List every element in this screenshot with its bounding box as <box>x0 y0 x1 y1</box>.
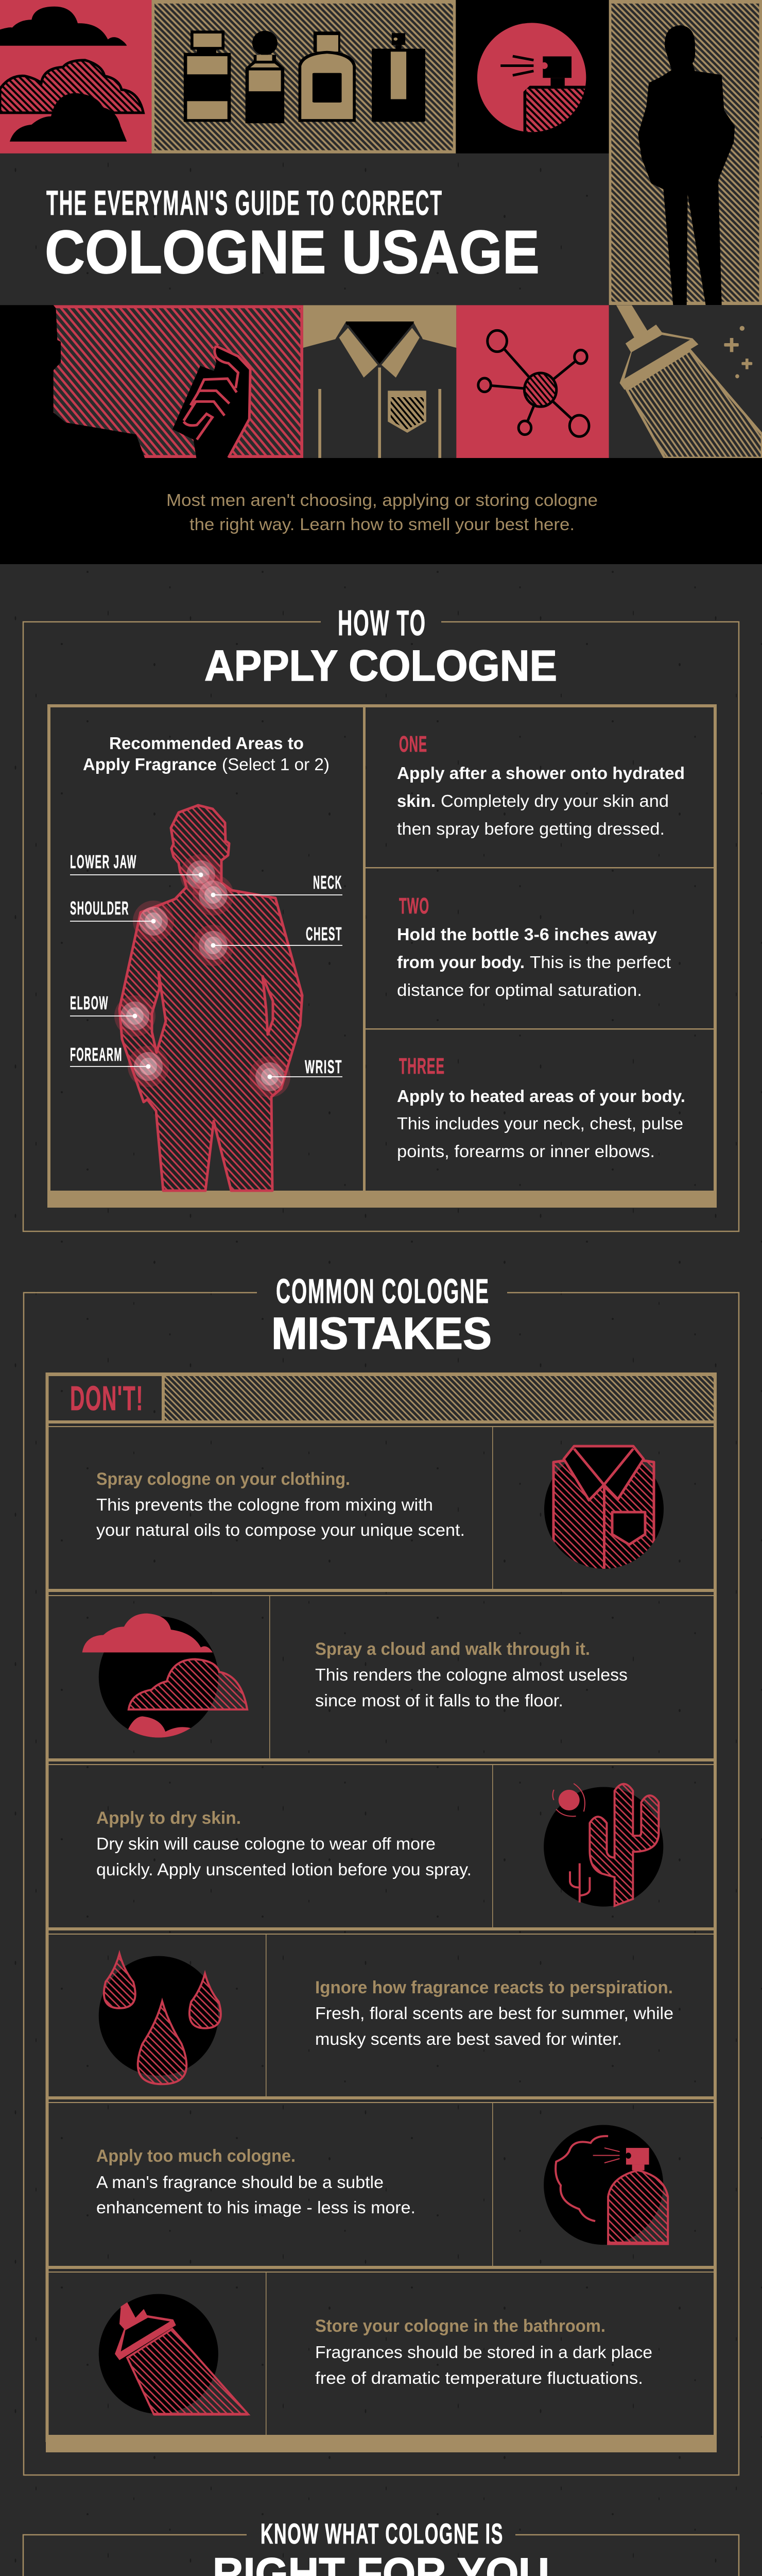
step two <box>397 893 671 999</box>
step three: points, forearms or inner elbows. <box>397 1142 655 1161</box>
recommended areas heading: Recommended Areas to <box>109 734 304 753</box>
label: neck: NECK <box>313 872 342 893</box>
mistake 2 text: This renders the cologne almost useless <box>315 1665 628 1684</box>
mistake 2 text: Spray a cloud and walk through it. <box>315 1639 590 1659</box>
heading: apply cologne: APPLY COLOGNE <box>204 641 557 690</box>
mistake 3 text: Dry skin will cause cologne to wear off more <box>96 1834 436 1853</box>
panel: clouds <box>0 0 151 154</box>
intro text: Most men aren't choosing, applying or storing cologne <box>166 490 598 510</box>
panel: man with hand <box>0 305 303 458</box>
body diagram <box>70 805 342 1191</box>
step three: Apply to heated areas of your body. <box>397 1087 685 1106</box>
section frame <box>24 1293 739 2475</box>
mistake 6 text <box>315 2316 652 2387</box>
step three: This includes your neck, chest, pulse <box>397 1114 683 1133</box>
heading line: kicker: THE EVERYMAN'S GUIDE TO CORRECT <box>46 183 443 223</box>
step two: from your body. <box>397 953 525 972</box>
icon: sweat drops <box>99 1954 221 2084</box>
mistake 6 text: Store your cologne in the bathroom. <box>315 2316 605 2336</box>
icon: spray bottle <box>544 2125 669 2245</box>
step two: TWO <box>399 893 429 919</box>
mistake 5 text: Apply too much cologne. <box>96 2146 296 2166</box>
recommended areas heading: Apply Fragrance <box>83 755 217 774</box>
section: know what cologne is right for you <box>23 2517 739 2576</box>
mistake 3 text: Apply to dry skin. <box>96 1808 241 1828</box>
mistake 1 text <box>96 1469 465 1539</box>
mistake 4 text: musky scents are best saved for winter. <box>315 2029 622 2048</box>
icon: shower <box>99 2294 248 2416</box>
section frame <box>23 622 739 1231</box>
step two: distance for optimal saturation. <box>397 980 642 999</box>
mistake 5 text <box>96 2146 415 2217</box>
panel: molecule <box>456 305 609 458</box>
label: shoulder: SHOULDER <box>70 897 129 919</box>
intro band <box>0 458 762 564</box>
panel: cologne bottles <box>151 0 456 154</box>
mistake 1 text: This prevents the cologne from mixing with <box>96 1495 433 1514</box>
step one <box>397 732 685 838</box>
step three: THREE <box>399 1054 445 1079</box>
step one: then spray before getting dressed. <box>397 819 665 838</box>
step two: This is the perfect <box>530 953 671 972</box>
mistake 2 text <box>315 1639 628 1710</box>
header illustration row 1 <box>0 0 762 305</box>
mistake 2 text: since most of it falls to the floor. <box>315 1691 563 1710</box>
step one: Apply after a shower onto hydrated <box>397 764 685 783</box>
heading: common cologne: COMMON COLOGNE <box>276 1272 490 1311</box>
row dividers <box>46 1426 717 2435</box>
step one: ONE <box>399 732 427 757</box>
label: chest: CHEST <box>306 923 342 944</box>
heading: know what cologne is: KNOW WHAT COLOGNE IS <box>261 2517 504 2550</box>
don't banner <box>46 1372 717 1423</box>
step two: Hold the bottle 3-6 inches away <box>397 925 657 944</box>
application points <box>114 854 290 1097</box>
step three <box>397 1054 685 1161</box>
heading: guide title <box>45 183 540 286</box>
panel: mistakes list <box>46 1372 717 2452</box>
mistake 4 text: Fresh, floral scents are best for summer, while <box>315 2004 673 2023</box>
header illustration row 2 <box>0 305 762 458</box>
intro text: the right way. Learn how to smell your best here. <box>189 515 575 534</box>
mistake 4 text: Ignore how fragrance reacts to perspiration. <box>315 1978 673 1997</box>
heading: mistakes: MISTAKES <box>271 1309 492 1359</box>
panel: shower head <box>609 305 762 458</box>
label: forearm: FOREARM <box>70 1044 123 1065</box>
intro text <box>166 490 598 534</box>
label: elbow: ELBOW <box>70 992 109 1013</box>
mistake 3 text <box>96 1808 472 1879</box>
step one: skin. <box>397 791 436 810</box>
heading: how to: HOW TO <box>338 603 426 643</box>
label: lower jaw: LOWER JAW <box>70 851 137 872</box>
mistake 5 text: A man's fragrance should be a subtle <box>96 2173 384 2192</box>
panel: man silhouette <box>609 0 762 305</box>
icon: cactus <box>544 1784 663 1907</box>
mistake 6 text: Fragrances should be stored in a dark place <box>315 2343 652 2362</box>
mistake 6 text: free of dramatic temperature fluctuations. <box>315 2368 643 2387</box>
section: how to apply cologne <box>23 603 739 1231</box>
mistake 1 text: your natural oils to compose your unique scent. <box>96 1520 465 1539</box>
heading line: main: COLOGNE USAGE <box>45 218 540 286</box>
icon: shirt <box>544 1446 664 1572</box>
recommended areas heading <box>83 734 330 774</box>
mistake 4 text <box>315 1978 673 2048</box>
panel: apply content <box>47 704 717 1208</box>
mistake 1 text: Spray cologne on your clothing. <box>96 1469 350 1489</box>
panel: shirt <box>303 305 456 458</box>
panel: spray nozzle circle <box>456 0 609 154</box>
label: wrist: WRIST <box>305 1056 342 1077</box>
step one: Completely dry your skin and <box>441 791 669 810</box>
recommended areas heading: (Select 1 or 2) <box>222 755 330 774</box>
don't banner: DON'T! <box>70 1379 144 1418</box>
icon: spray cloud <box>82 1614 247 1740</box>
mistake 3 text: quickly. Apply unscented lotion before you spray. <box>96 1860 472 1879</box>
mistake 5 text: enhancement to his image - less is more. <box>96 2198 415 2217</box>
section: common cologne mistakes <box>24 1272 739 2475</box>
leader lines <box>70 873 342 1079</box>
section frame <box>23 2535 739 2576</box>
